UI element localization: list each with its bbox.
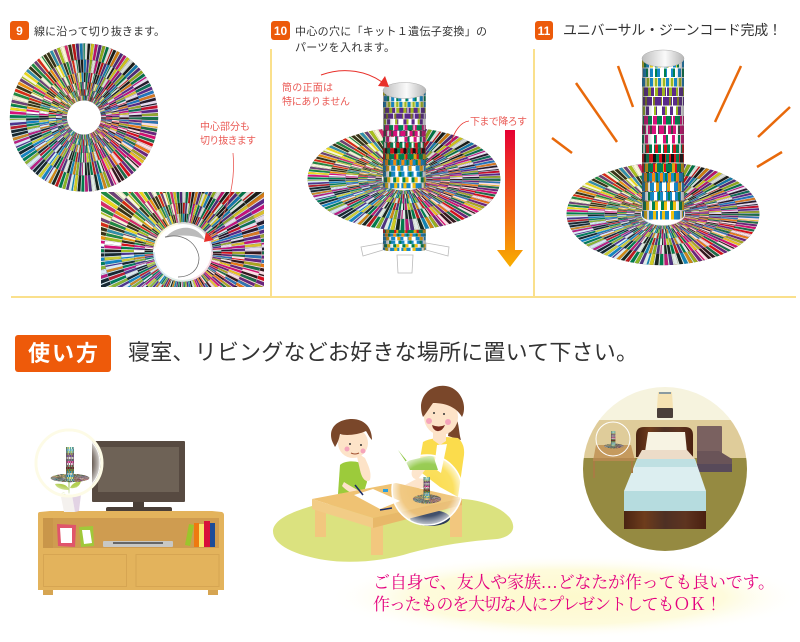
how to use heading: 寝室、リビングなどお好きな場所に置いて下さい。: [128, 340, 638, 365]
callout: no front: 特にありません: [282, 96, 350, 108]
books: [185, 521, 215, 547]
down arrow: [497, 130, 523, 267]
zoomed centre cut: [101, 192, 264, 287]
paper and pens: [354, 485, 400, 510]
cut out disc: [15, 48, 153, 187]
burst lines: [552, 66, 790, 167]
lower tube part: [383, 190, 426, 253]
legs under table: [410, 510, 450, 526]
step 9 heading: 線に沿って切り抜きます。: [34, 24, 165, 38]
callout: no front: 筒の正面は: [282, 81, 333, 94]
message text: [373, 573, 775, 614]
step 9 badge: 9: [16, 24, 23, 38]
step 10 heading: 中心の穴に「キット１遺伝子変換」の: [295, 24, 487, 38]
step 11 badge: [535, 21, 553, 40]
step 10 heading: パーツを入れます。: [295, 41, 395, 54]
tv: [92, 441, 185, 512]
bed: [624, 427, 706, 529]
glowing mini model: [596, 422, 630, 456]
lamp: [657, 392, 673, 418]
illustration: bedroom: [583, 387, 747, 552]
panel: step 9 cut out: [10, 21, 264, 287]
child: [331, 419, 372, 496]
how to use badge: [15, 335, 111, 372]
callout: cut the centre: 切り抜きます: [200, 134, 256, 147]
step 11 badge: 11: [538, 24, 551, 38]
tube: [383, 82, 426, 192]
callout: lower it: 下まで降ろす: [470, 115, 527, 128]
step 10 heading: [295, 24, 487, 54]
night table: [593, 445, 635, 478]
message glow: [328, 555, 800, 639]
step 9 badge: [10, 21, 29, 40]
step 10 badge: 10: [274, 24, 287, 38]
panel: step 11 complete: [535, 21, 790, 262]
glowing mini model: [36, 430, 102, 496]
callout: lower it: [450, 115, 527, 145]
step 11 heading: ユニバーサル・ジーンコード完成！: [563, 22, 782, 38]
message text: ご自身で、友人や家族…どなたが作っても良いです。: [373, 573, 775, 592]
player: [103, 541, 173, 547]
callout: no front: [282, 71, 389, 108]
divider lines: [11, 49, 796, 298]
ground: [273, 499, 513, 562]
room circle: [583, 387, 747, 552]
photo frames: [57, 524, 94, 547]
step 10 badge: [271, 21, 290, 40]
finished disc: [573, 166, 753, 262]
finished tube: [642, 50, 684, 225]
illustration: parent and child: [273, 386, 513, 562]
message text: 作ったものを大切な人にプレゼントしてもＯＫ！: [373, 595, 722, 614]
how to use badge: 使い方: [28, 341, 98, 366]
paper flaps: [361, 243, 449, 273]
low table: [312, 483, 462, 555]
plant: [55, 480, 81, 512]
mother: [398, 386, 464, 497]
panel: step 10 insert parts: [271, 21, 527, 273]
illustration: tv cabinet: [36, 430, 224, 595]
callout: cut the centre: [200, 120, 256, 242]
cabinet: [38, 511, 224, 595]
chair: [697, 426, 732, 472]
callout: cut the centre: 中心部分も: [200, 120, 250, 133]
perspective disc: [314, 131, 494, 227]
glowing mini model: [392, 455, 462, 525]
